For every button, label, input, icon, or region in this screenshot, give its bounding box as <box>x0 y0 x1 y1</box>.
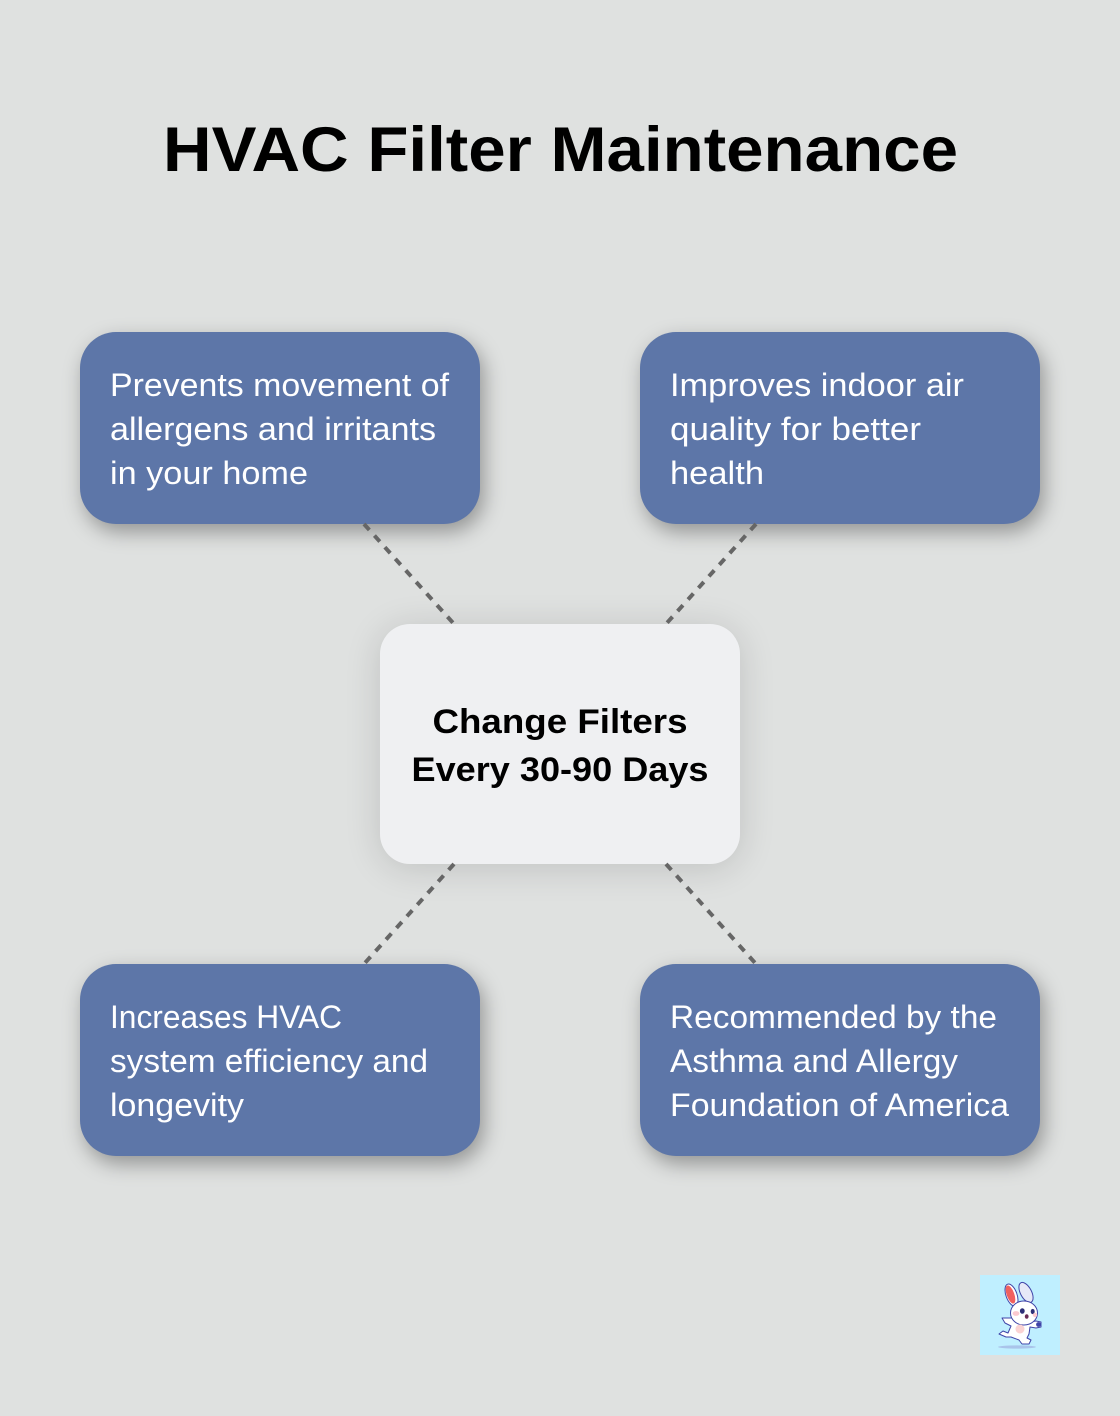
text block: center heading: Change Filters <box>432 703 688 741</box>
panel: top right benefit <box>640 332 1040 524</box>
icon: rabbit body <box>999 1301 1041 1344</box>
panel: bottom left benefit <box>80 964 480 1156</box>
text block: bottom right benefit: Recommended by the <box>670 999 997 1035</box>
text block: bottom left benefit: system efficiency and <box>110 1043 428 1079</box>
text block: top right benefit: health <box>670 455 764 491</box>
text block: bottom right benefit: Foundation of America <box>670 1087 1009 1123</box>
text block: top left benefit <box>110 367 449 491</box>
icon: rabbit logo <box>980 1275 1060 1355</box>
text block: top right benefit: quality for better <box>670 411 921 447</box>
text block: bottom right benefit <box>670 999 1009 1123</box>
text block: top left benefit: in your home <box>110 455 308 491</box>
text block: center heading <box>412 703 708 789</box>
text block: top right benefit <box>670 367 964 491</box>
title: HVAC Filter Maintenance <box>163 115 958 185</box>
text block: top left benefit: Prevents movement of <box>110 367 449 403</box>
text block: top right benefit: Improves indoor air <box>670 367 964 403</box>
arrow: connector top right <box>666 524 756 624</box>
text block: bottom left benefit: longevity <box>110 1087 244 1123</box>
panel: bottom right benefit <box>640 964 1040 1156</box>
arrow: connector top left <box>364 524 454 624</box>
text block: center heading: Every 30-90 Days <box>412 751 708 789</box>
text block: bottom left benefit: Increases HVAC <box>110 999 342 1035</box>
panel: top left benefit <box>80 332 480 524</box>
text block: top left benefit: allergens and irritants <box>110 411 436 447</box>
arrow: connector bottom right <box>666 864 756 964</box>
text block: bottom right benefit: Asthma and Allergy <box>670 1043 958 1079</box>
icon: rabbit face <box>1013 1308 1041 1334</box>
panel: center box <box>380 624 740 864</box>
icon: rabbit ears <box>1002 1280 1036 1308</box>
arrow: connector bottom left <box>364 864 454 964</box>
text block: bottom left benefit <box>110 999 428 1123</box>
